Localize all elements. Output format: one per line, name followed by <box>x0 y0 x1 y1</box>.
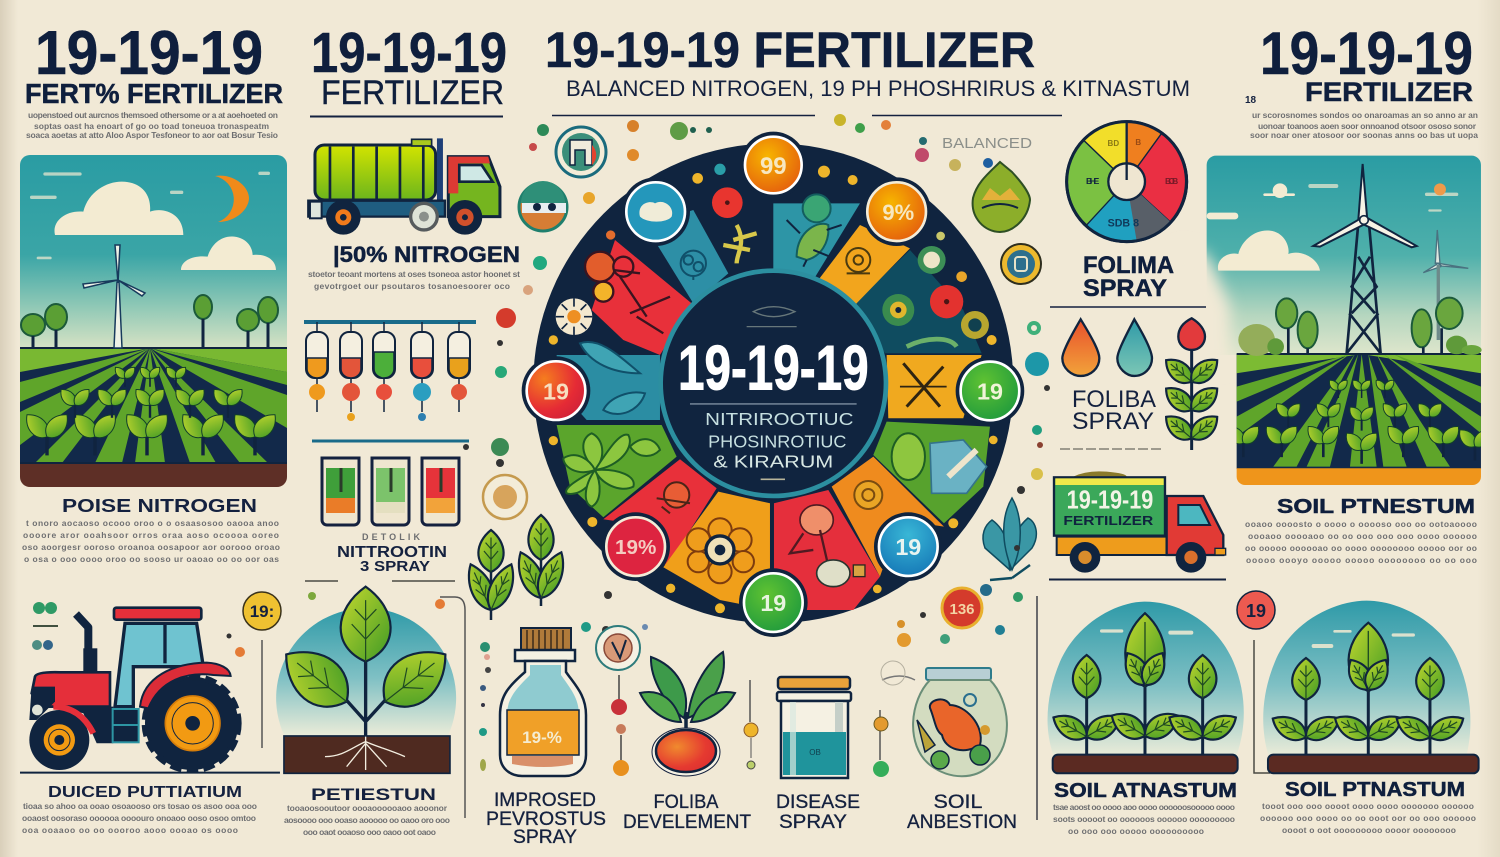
label: nitrootin spray <box>337 532 447 575</box>
title: second column <box>311 21 507 112</box>
text block: soil atnastum: tsae aoost oo oooo aoo oooo oooooosooooo oooo <box>1053 802 1235 812</box>
panel: soil plants left <box>1048 602 1244 773</box>
icon: jar <box>777 677 851 778</box>
title: second column: FERTILIZER <box>321 74 504 112</box>
panel: left landscape <box>20 155 287 487</box>
text block: petiestun: aosoooo ooo ooaso aooooo oo oaoo oro ooo <box>284 815 450 825</box>
wheel segment icons <box>549 164 998 613</box>
icon: face badge <box>519 181 567 231</box>
label: folia spray 1 <box>1083 252 1174 302</box>
label: soil absorption <box>907 792 1017 833</box>
title: right column: 19-19-19 <box>1260 20 1473 87</box>
icon: fertilizer truck: FERTILIZER <box>1063 513 1154 528</box>
label: soil atnastum: SOIL ATNASTUM <box>1054 780 1237 802</box>
text block: left intro: uopenstoed out aurcnos themsoed othersome or a at aoehoeted on <box>28 110 278 120</box>
text block: petiestun: ooo oaot ooaoso ooo oaoo oot oaoo <box>303 827 436 837</box>
text block: poise nitrogen <box>22 518 280 564</box>
icon: teal leaf branch <box>983 498 1036 580</box>
label: soil absorption: SOIL <box>934 792 982 813</box>
text block: soil ptnestum <box>1245 519 1477 565</box>
icon: apple top <box>692 164 743 218</box>
label: soil ptnestum: SOIL PTNESTUM <box>1277 496 1475 518</box>
pie chart: B <box>1135 138 1141 147</box>
text block: soil ptnestum: ooooo oooyo ooooo ooooo oooooooo oo oo ooo <box>1246 555 1477 565</box>
text block: nitrogen <box>308 269 520 291</box>
wheel badges: 99 <box>760 153 787 180</box>
connector: dots by seedling <box>744 680 758 769</box>
wheel center: 19-19-19 <box>678 333 869 403</box>
wheel badges: 9% <box>882 200 914 225</box>
text block: right intro: ur scorosnomes sondos oo onaroamas an so anno ar an <box>1252 110 1478 120</box>
icon: teal leaves <box>580 342 645 414</box>
icon: fertilizer truck <box>1054 471 1226 573</box>
label: folia spray 1: FOLIMA <box>1083 252 1174 279</box>
connector: dots by bottle <box>596 626 640 776</box>
label: improsed: SPRAY <box>513 827 577 848</box>
icon: badge top left <box>556 127 606 177</box>
label: folia spray 2: FOLIBA <box>1072 386 1156 413</box>
icon: tractor <box>20 608 280 773</box>
icon: orange flower <box>687 518 754 583</box>
label: soil ptnastum: SOIL PTNASTUM <box>1285 779 1465 801</box>
title: main: 19-19-19 FERTILIZER <box>545 22 1035 78</box>
title: right column: FERTILIZER <box>1305 77 1473 107</box>
icon: test tubes <box>304 322 476 421</box>
label: disease spray: DISEASE <box>776 792 860 813</box>
icon: tanker truck <box>308 138 500 235</box>
label: folia spray 2 <box>1072 386 1156 435</box>
badge: 19 red: 19 <box>1246 601 1266 621</box>
icon: red flowers <box>585 252 670 333</box>
label: balanced: BALANCED <box>942 135 1032 152</box>
text block: soil ptnastum: oooooo ooo oooo oo oo ooot oor oo ooo oooooo <box>1260 813 1476 823</box>
connector: dots by jar <box>873 661 915 777</box>
pie chart: BHE <box>1086 176 1100 186</box>
text block: left intro: soaca aoetas at atto Aloo Aspor Tesfoneor to aor oat Bosur Tesio <box>26 130 278 140</box>
wheel center: PHOSINROTIUC <box>708 431 846 451</box>
label: folia development: FOLIBA <box>654 792 719 813</box>
title: second column: 19-19-19 <box>311 21 507 85</box>
text block: poise nitrogen: o osa o ooo oooo oroo oo sooso ur oaoao oo oo oor oas <box>24 554 279 564</box>
label: folia spray 2: SPRAY <box>1072 408 1154 435</box>
badge: 19 yellow: 19: <box>250 602 274 621</box>
icon: crescent <box>215 176 249 222</box>
wheel badges: 19 <box>895 534 921 560</box>
icon: amber curl <box>846 248 870 273</box>
labels: bottom row <box>486 790 1017 848</box>
wheel center: NITRIROOTIUC <box>705 409 853 429</box>
wheel chart <box>522 132 1024 637</box>
panel: right landscape <box>1180 156 1495 485</box>
pie chart <box>1067 122 1187 242</box>
icon: crossed leaves <box>900 363 947 407</box>
icon: red flower and glove <box>790 505 865 587</box>
icon: red curl <box>657 482 690 513</box>
label: improsed: PEVROSTUS <box>486 809 606 830</box>
icon: fertilizer truck: 19-19-19 <box>1067 484 1153 514</box>
pie chart: SDB 8 <box>1108 218 1139 230</box>
icon: blue swirl <box>681 251 706 280</box>
panel: soil plants right <box>1263 601 1479 773</box>
icon: jar: OB <box>809 748 821 757</box>
icon: green clover <box>563 433 660 507</box>
text block: right intro: soor noar oner atosoor oor soonas anns oo bas ut uopa <box>1250 130 1478 140</box>
decorative marks: tractor <box>32 592 316 657</box>
text block: soil atnastum: soots ooooot oo oooooos oooooo ooooooooo <box>1053 814 1235 824</box>
text block: petiestun: tooaoosooutoor oooaoooooaoo aooonor <box>287 803 448 813</box>
badge: 19 yellow <box>243 592 281 630</box>
icon: bottle: 19-% <box>522 728 562 747</box>
connector: plant panel <box>440 597 465 818</box>
label: folia development <box>623 792 751 833</box>
title: main: BALANCED NITROGEN, 19 PH PHOSHRIRUS & KITNASTUM <box>566 76 1190 101</box>
text block: soil ptnastum: tooot ooo ooo oooot oooo oooo ooooooo oooooo <box>1262 801 1474 811</box>
wheel badges: 19 <box>543 378 569 404</box>
text block: nitrogen: gevotrgoet our psoutaros tosanoesoorer oco <box>314 281 510 291</box>
pie chart: BD <box>1108 139 1119 148</box>
text block: nitrogen: stoetor teoant mortens at oses tsoneoa astor hoonet st <box>308 269 520 279</box>
label: nitrogen: |50% NITROGEN <box>333 242 520 267</box>
label: folia development: DEVELEMENT <box>623 812 751 833</box>
icon: lattice tower <box>1347 223 1381 353</box>
wheel badges <box>522 132 1024 637</box>
sprouts <box>21 365 281 455</box>
clouds <box>1207 183 1458 271</box>
text block: soil ptnestum: oooaoo ooooaoo oo oo ooo ooo ooo oooo oooooo <box>1248 531 1477 541</box>
text block: right intro: uonoar toanoos aoen soor onnoanod otsoor ososo sonor <box>1258 121 1477 131</box>
label: improsed: IMPROSED <box>494 790 596 811</box>
icon: wind turbine <box>83 245 145 348</box>
label: petiestun: PETIESTUN <box>311 785 436 804</box>
label: soil absorption: ANBESTION <box>907 812 1017 833</box>
icon: distant turbine <box>1423 230 1468 273</box>
text block: poise nitrogen: oooore aror ooahsoor orros oraa aoso ocoooa ooreo <box>23 530 279 540</box>
text block: soil atnastum <box>1053 802 1235 836</box>
icon: bottle <box>500 628 586 776</box>
label: improsed <box>486 790 606 848</box>
field <box>1237 354 1481 469</box>
dots <box>463 114 1050 647</box>
label: educed potassium: DUICED PUTTIATIUM <box>48 784 242 801</box>
wheel badges: 19 <box>977 378 1003 404</box>
icon: small top-right leaf face <box>973 162 1030 232</box>
badge: 136: 136 <box>949 601 975 618</box>
wheel center <box>661 271 886 496</box>
text block: soil ptnastum: oooot o oot ooooooooo oooor oooooooo <box>1282 825 1456 835</box>
icon: green figure <box>787 194 842 267</box>
label: poise nitrogen: POISE NITROGEN <box>62 496 257 516</box>
icon: plant with roots <box>272 587 460 773</box>
text block: poise nitrogen: t onoro aocaoso ocooo oroo o o osaasosoo oaooa anoo <box>26 518 279 528</box>
label: disease spray <box>776 792 860 833</box>
trees <box>21 295 278 336</box>
icon: sun <box>556 298 592 335</box>
text block: left intro <box>26 110 278 140</box>
label: disease spray: SPRAY <box>779 812 847 833</box>
label: nitrootin spray: NITTROOTIN <box>337 544 447 561</box>
text block: soil atnastum: oo ooo ooo ooooo oooooooooo <box>1068 826 1204 836</box>
text block: potassium: ooaost oosoraso oooooa oooouro onoaoo ooso osoo omtoo <box>22 813 256 823</box>
label: nitrootin spray: DETOLIK <box>362 532 420 542</box>
icon: seedling fruit <box>640 652 735 776</box>
badge: 19 red <box>1237 591 1275 629</box>
wheel badges: 19% <box>615 536 656 559</box>
title: main <box>545 22 1190 101</box>
text block: soil ptnestum: ooaoo oooosto o oooo o ooooso ooo oo ootoaoooo <box>1245 519 1477 529</box>
text block: potassium <box>22 801 257 835</box>
title: left column: FERT% FERTILIZER <box>25 78 283 109</box>
title: right column: 18 <box>1245 95 1257 106</box>
field <box>20 348 287 463</box>
decorative marks near plant <box>479 642 491 771</box>
icon: left leaf sprig <box>461 530 521 620</box>
text block: left intro: soptas oast ha enoart of go oo toad toneuoa tronaspeatm <box>34 121 269 131</box>
label: nitrootin spray: 3 SPRAY <box>360 558 430 575</box>
text block: potassium: tioaa so ahoo oa ooao osoaooso ors tosao os asoo ooa ooo <box>23 801 257 811</box>
text block: soil ptnestum: oo ooooo oooooao oo oooo oooooooo ooooo oor oo <box>1245 543 1477 553</box>
text block: petiestun <box>284 803 450 837</box>
clouds <box>30 172 276 270</box>
wheel badges: 19 <box>760 590 786 616</box>
icon: green and blue cluster <box>892 433 998 493</box>
icon: yellow leaf sprig <box>723 225 757 263</box>
label: folia spray 1: SPRAY <box>1083 275 1167 302</box>
pie chart: BOB <box>1165 176 1178 186</box>
icon: three jars <box>312 441 469 525</box>
text block: potassium: ooa ooaaoo oo oo oooroo aooo oooao os oooo <box>22 825 238 835</box>
text block: soil ptnastum <box>1260 801 1476 835</box>
icon: shield badge <box>1001 244 1041 284</box>
wheel center: & KIRARUM <box>713 451 833 471</box>
text block: right intro <box>1250 110 1478 140</box>
icon: right leaf sprig <box>511 515 571 606</box>
small icons around wheel <box>461 114 1050 647</box>
icon: bowl jar <box>913 668 1007 776</box>
text block: poise nitrogen: oso aoorgesr ooroso oroanoa oosapoor aor oorooo oroao <box>22 542 280 552</box>
badge: 136 <box>942 588 982 628</box>
title: left column: 19-19-19 <box>35 19 263 88</box>
wheel segments <box>557 203 990 610</box>
icon: dark teal fruits <box>882 232 997 347</box>
trees <box>1276 298 1463 348</box>
icon: drops and sprout <box>1062 318 1223 450</box>
title: right column <box>1245 20 1473 107</box>
icon: orange curl <box>854 481 882 509</box>
